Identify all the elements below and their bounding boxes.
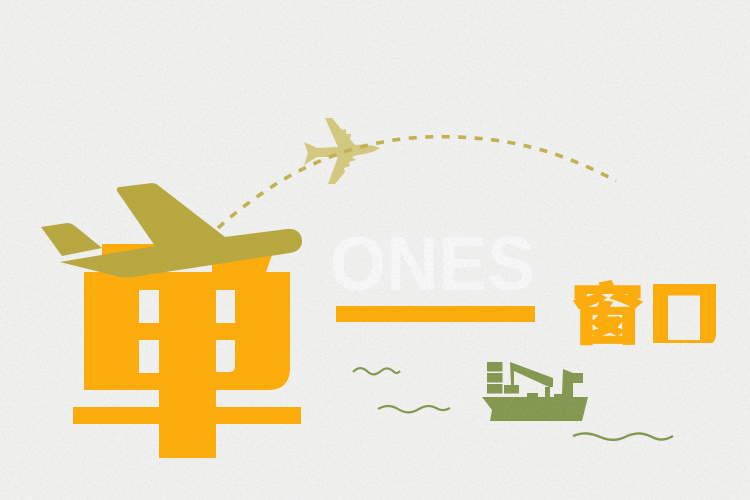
wave 3 xyxy=(573,433,673,440)
icon: small airplane xyxy=(304,118,380,184)
icon: cargo ship xyxy=(482,362,588,421)
wave 1 xyxy=(353,368,400,374)
title character: 口: 口 xyxy=(650,255,718,377)
ONES label: ONES xyxy=(330,222,535,307)
title character: 口 xyxy=(653,284,716,343)
title character: 窗: 窗 xyxy=(571,262,644,357)
title character: 单: 单 xyxy=(70,308,304,465)
dashed flight path xyxy=(218,137,616,228)
wave 2 xyxy=(378,406,450,412)
title character: 一: 一 xyxy=(335,263,535,375)
icon: large airplane xyxy=(41,183,302,278)
